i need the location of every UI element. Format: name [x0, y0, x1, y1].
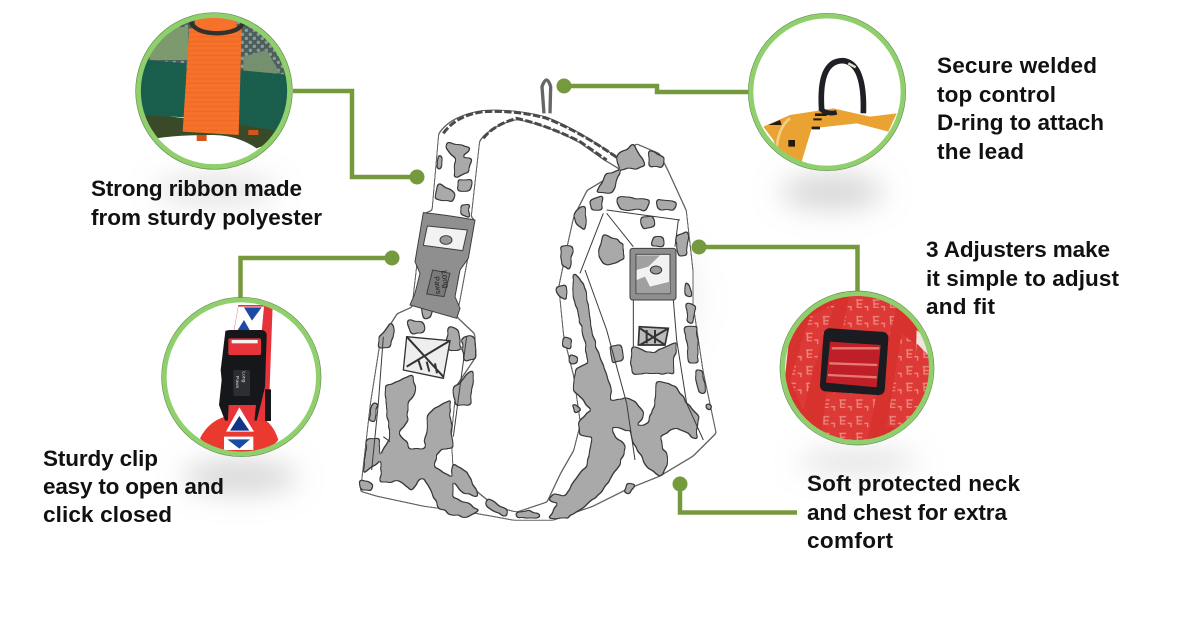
text: clip	[43, 446, 224, 527]
text: D-ring: D-ring to attach	[937, 110, 1104, 135]
text: neck and chest: Soft protected neck	[807, 471, 1020, 496]
circle drop shadows	[154, 175, 918, 493]
text: ribbon: from sturdy polyester	[91, 205, 322, 230]
harness body outline	[360, 110, 717, 521]
photo circle: D-ring	[748, 13, 906, 171]
text: clip: easy to open and	[43, 474, 224, 499]
connector: D-ring	[556, 78, 748, 94]
connector: clip	[240, 250, 400, 299]
right stitched tag	[638, 327, 668, 345]
left stitched tag	[403, 337, 450, 378]
side buckle: Paws	[432, 276, 443, 295]
text: clip: Sturdy clip	[43, 446, 158, 471]
text: neck and chest: comfort	[807, 528, 894, 553]
harness illustration	[360, 80, 717, 521]
right adjuster	[630, 248, 676, 300]
top cord texture	[443, 111, 617, 160]
text: D-ring: Secure welded	[937, 53, 1097, 78]
text: clip: click closed	[43, 502, 172, 527]
text: D-ring: the lead	[937, 139, 1024, 164]
text: D-ring	[937, 53, 1104, 164]
buckle logo: Long	[439, 270, 451, 289]
photo circle: orange ribbon	[133, 13, 293, 169]
text: ribbon	[91, 176, 322, 230]
photo circle: clip: Long	[241, 371, 247, 383]
connector: adjusters	[692, 240, 858, 291]
text: neck and chest	[807, 471, 1020, 553]
connector: ribbon	[293, 91, 424, 184]
text: adjusters: and fit	[926, 294, 996, 319]
text: adjusters: 3 Adjusters make	[926, 237, 1110, 262]
cow-pattern patches	[360, 142, 713, 518]
side buckle	[410, 213, 475, 318]
D-ring	[542, 80, 551, 113]
text: adjusters: it simple to adjust	[926, 266, 1120, 291]
photo circle: clip: Paws	[234, 376, 240, 389]
text: adjusters	[926, 237, 1120, 319]
photo circle: adjuster	[780, 290, 937, 447]
text: ribbon: Strong ribbon made	[91, 176, 302, 201]
strap edge lines	[372, 210, 703, 470]
photo circle: clip	[162, 297, 321, 457]
text: neck and chest: and chest for extra	[807, 500, 1007, 525]
text: D-ring: top control	[937, 82, 1056, 107]
connector: neck and chest	[672, 476, 797, 512]
